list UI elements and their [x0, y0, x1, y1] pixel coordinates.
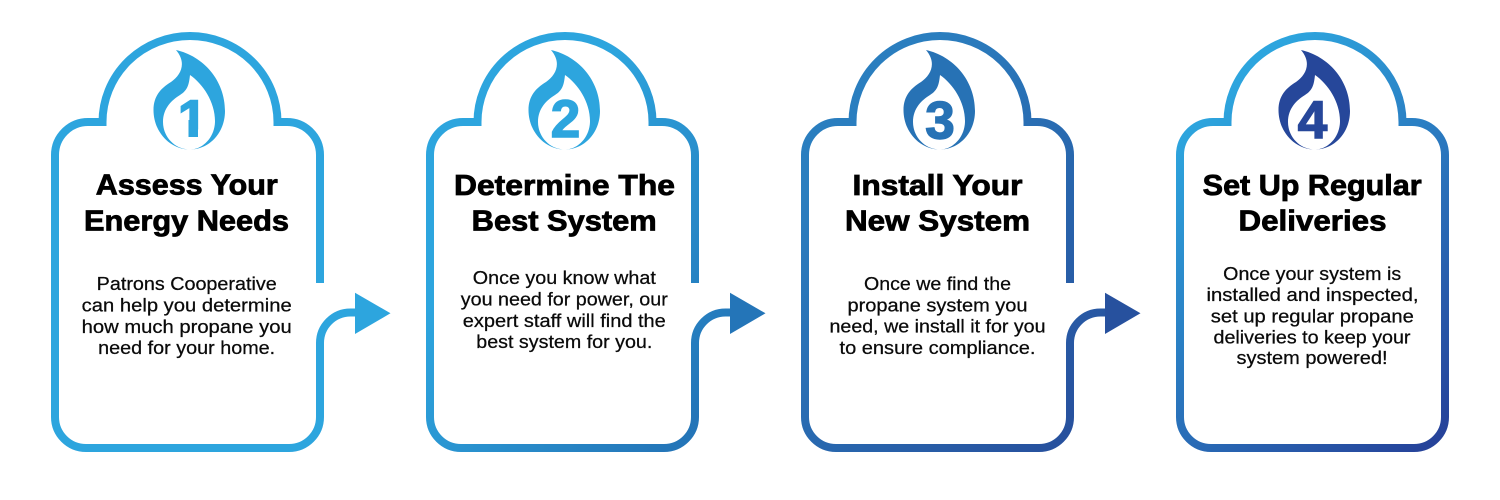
card outline with connector 2: [430, 36, 733, 448]
text: step 3 description: need, we install it for you: [830, 316, 1046, 337]
heading: step 1: Energy Needs: [84, 206, 289, 238]
text: step 4 description: system powered!: [1236, 347, 1388, 368]
text: step 4 description: installed and inspected,: [1206, 284, 1418, 305]
text: step 2 description: Once you know what: [473, 267, 656, 288]
heading: step 2: Best System: [472, 206, 657, 238]
heading: step 1: Assess Your: [96, 170, 278, 202]
heading: step 2: Determine The: [454, 170, 675, 202]
text: step 1 description: how much propane you: [82, 316, 292, 337]
text: step 1 description: need for your home.: [98, 337, 275, 358]
icon: flame with number 3: [904, 50, 975, 150]
icon: flame with number 4: [1278, 50, 1350, 150]
card outline: [1180, 36, 1445, 448]
heading: step 3: New System: [845, 206, 1030, 238]
icon: flame with number 1: [154, 50, 225, 150]
panel: step 3 install your new system: [805, 36, 1140, 448]
text: step 3 description: Once we find the: [864, 273, 1011, 294]
panel: step 4 set up regular deliveries: [1180, 36, 1445, 448]
heading: step 4: Set Up Regular: [1203, 170, 1422, 202]
arrow 2: [730, 293, 766, 334]
arrow 1: [355, 293, 390, 334]
arrow 3: [1105, 293, 1140, 334]
card outline with connector 3: [805, 36, 1108, 448]
heading: step 4: Deliveries: [1238, 206, 1386, 238]
text: step 1 description: can help you determine: [82, 294, 292, 316]
card outline with connector 1: [55, 36, 358, 448]
icon: flame with number 2: [528, 50, 600, 150]
panel: step 2 determine the best system: [430, 36, 766, 448]
text: step 4 description: Once your system is: [1223, 263, 1401, 284]
icon: flame with number 3: 3: [925, 92, 955, 150]
panel: step 1 assess your energy needs: [55, 36, 390, 448]
text: step 1 description: Patrons Cooperative: [97, 273, 277, 294]
icon: flame with number 4: 4: [1298, 91, 1328, 150]
text: step 3 description: propane system you: [848, 295, 1028, 316]
heading: step 3: Install Your: [852, 170, 1022, 202]
text: step 2 description: best system for you.: [476, 331, 652, 352]
icon: flame with number 2: 2: [551, 90, 580, 149]
icon: flame with number 1: 1: [178, 90, 207, 149]
text: step 2 description: expert staff will find the: [463, 310, 666, 331]
text: step 4 description: deliveries to keep your: [1214, 326, 1410, 347]
text: step 4 description: set up regular propane: [1211, 305, 1414, 326]
text: step 3 description: to ensure compliance.: [840, 337, 1036, 358]
text: step 2 description: you need for power, our: [461, 288, 668, 310]
